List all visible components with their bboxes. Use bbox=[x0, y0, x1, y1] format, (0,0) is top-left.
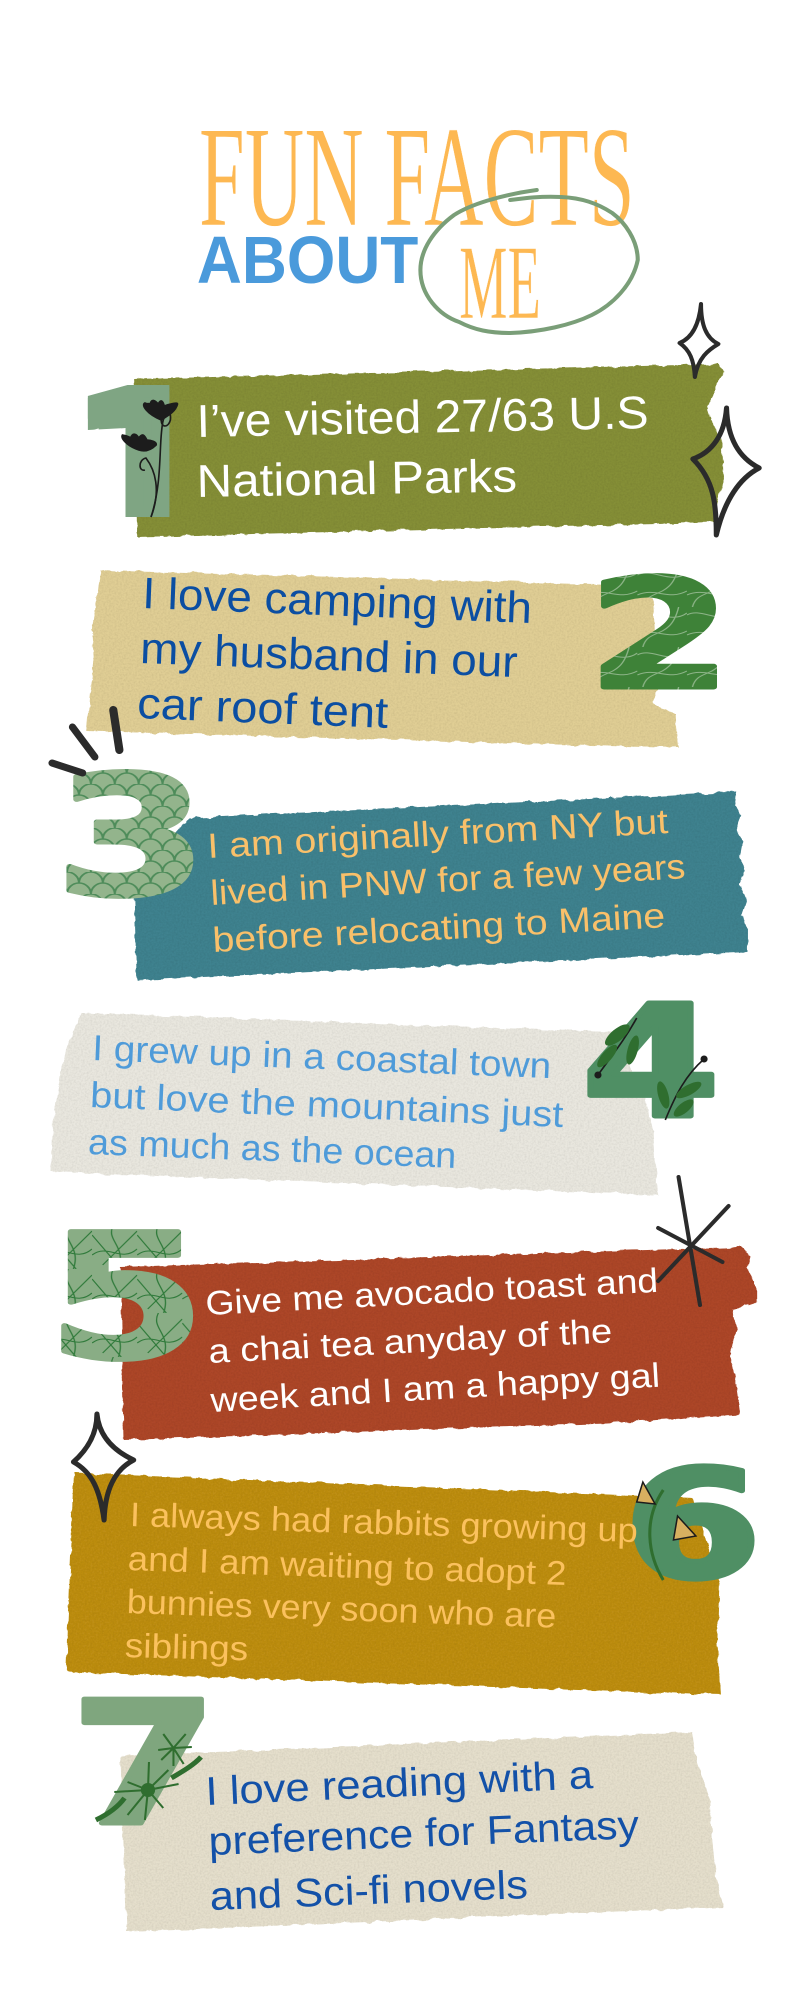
fact text: and Sci-fi novels bbox=[209, 1861, 529, 1919]
icon: flowers bbox=[122, 400, 178, 517]
fact text: bunnies very soon who are bbox=[126, 1583, 557, 1636]
fact text: siblings bbox=[124, 1627, 249, 1668]
fact text: I’ve visited 27/63 U.S bbox=[196, 387, 649, 447]
tape: cream bbox=[120, 1732, 724, 1932]
fact text: I am originally from NY but bbox=[206, 802, 669, 866]
panel: fact 2 bbox=[87, 547, 732, 748]
icon: asterisk star bbox=[658, 1177, 729, 1305]
icon: leaf sprigs bbox=[594, 1018, 708, 1120]
panel: fact 3 bbox=[52, 710, 748, 980]
icon: small sparkle bbox=[680, 304, 718, 377]
tape: rust bbox=[120, 1247, 757, 1440]
number 3: 3 bbox=[55, 741, 207, 933]
heading: me: ME bbox=[459, 225, 541, 342]
fact text: my husband in our bbox=[139, 624, 519, 687]
fact text: but love the mountains just bbox=[89, 1074, 564, 1135]
tape: ochre bbox=[66, 1473, 720, 1695]
panel: fact 7 bbox=[70, 1666, 724, 1932]
icon: emphasis dashes bbox=[52, 710, 119, 773]
fact text: car roof tent bbox=[136, 679, 390, 738]
icon: green flowers bbox=[96, 1734, 201, 1820]
panel: fact 1 bbox=[88, 302, 762, 538]
fact text: and I am waiting to adopt 2 bbox=[127, 1540, 567, 1593]
fact text bbox=[87, 1027, 564, 1176]
icon: large sparkle bbox=[693, 408, 759, 535]
fact text bbox=[205, 1262, 661, 1420]
fact text bbox=[124, 1496, 638, 1668]
panel: fact 4 bbox=[51, 973, 720, 1195]
number 4: 4 bbox=[582, 973, 720, 1153]
fact text: I grew up in a coastal town bbox=[92, 1027, 552, 1086]
fact text bbox=[196, 387, 649, 507]
heading: about: ABOUT bbox=[197, 224, 418, 298]
number 1: 1 bbox=[31, 345, 246, 557]
tape: teal bbox=[134, 792, 748, 980]
fact text: National Parks bbox=[196, 450, 517, 507]
fact text bbox=[204, 1751, 641, 1919]
fact text: preference for Fantasy bbox=[208, 1801, 641, 1864]
fact text: before relocating to Maine bbox=[212, 897, 666, 960]
title bbox=[197, 97, 638, 342]
fact text: Give me avocado toast and bbox=[205, 1262, 659, 1323]
fact text: week and I am a happy gal bbox=[208, 1357, 661, 1420]
number 6: 6 bbox=[623, 1437, 762, 1613]
number 5: 5 bbox=[47, 1197, 206, 1398]
fact text bbox=[206, 802, 686, 960]
fact text: I love reading with a bbox=[204, 1751, 594, 1814]
fact text: I love camping with bbox=[141, 569, 533, 633]
panel: fact 5 bbox=[47, 1177, 757, 1440]
tape: olive bbox=[134, 364, 723, 537]
fact text: a chai tea anyday of the bbox=[208, 1313, 613, 1371]
number 7: 7 bbox=[70, 1666, 218, 1864]
number 2: 2 bbox=[588, 547, 732, 723]
tape: sand bbox=[87, 570, 679, 748]
icon: sparkle bbox=[73, 1414, 134, 1520]
tape: off-white bbox=[51, 1013, 658, 1195]
fact text: as much as the ocean bbox=[87, 1121, 457, 1176]
fact text: lived in PNW for a few years bbox=[209, 848, 686, 913]
icon: leaf sprig and seed pods bbox=[637, 1482, 696, 1580]
panel: fact 6 bbox=[66, 1414, 762, 1695]
fact text bbox=[136, 569, 533, 738]
fact text: I always had rabbits growing up bbox=[129, 1496, 638, 1550]
hand-drawn circle bbox=[420, 190, 638, 333]
